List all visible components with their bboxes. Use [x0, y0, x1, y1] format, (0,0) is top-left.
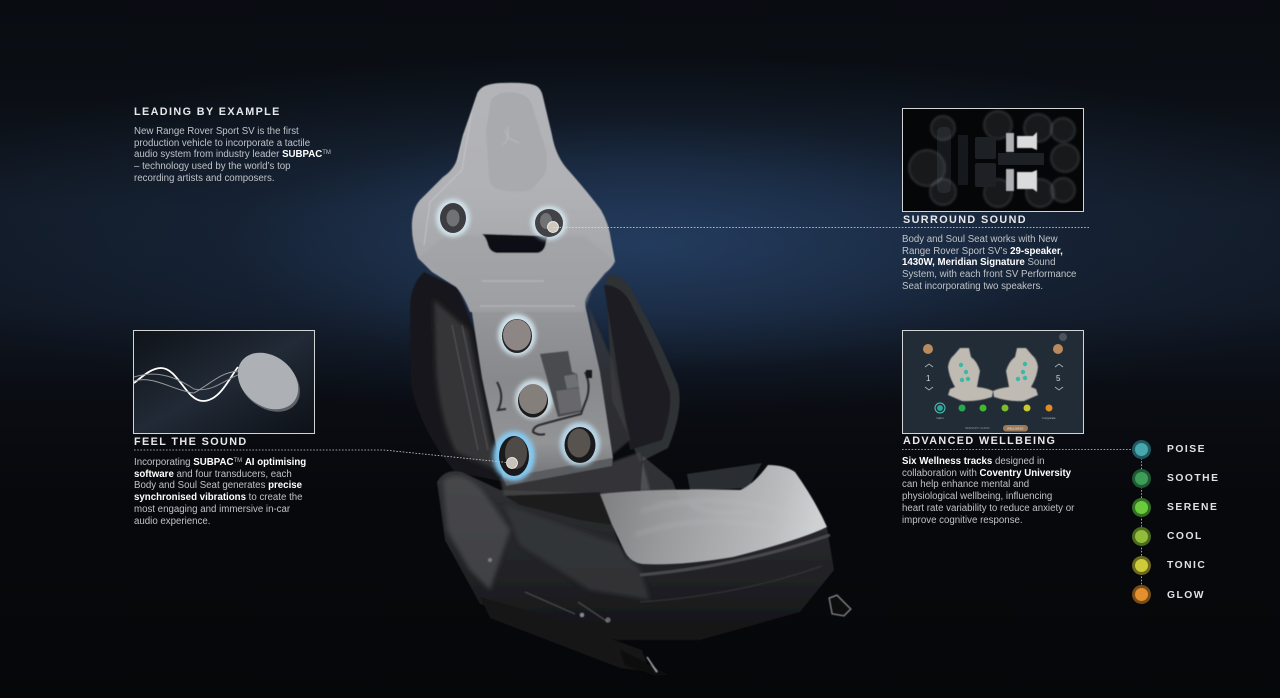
text: advanced wellbeing: collaboration with Coventry University — [902, 468, 1071, 479]
text: advanced wellbeing — [902, 456, 1074, 526]
label: tonic: TONIC — [1167, 560, 1206, 571]
image: top view of cabin speakers — [902, 108, 1084, 212]
image: wellness touchscreen: Invigorate — [1042, 416, 1056, 420]
text: surround sound: Range Rover Sport SV’s 29-speaker, — [902, 246, 1063, 257]
text: advanced wellbeing: can help enhance mental and — [902, 479, 1029, 490]
image: wellness touchscreen: SENSORY AUDIO — [965, 426, 990, 430]
text: leading by example: recording artists and composers. — [134, 173, 275, 184]
seat cushion — [600, 456, 827, 564]
seat rails and feet — [620, 595, 851, 676]
text: surround sound — [902, 234, 1076, 292]
heading: advanced wellbeing: ADVANCED WELLBEING — [903, 435, 1056, 447]
image: transducer with sound waves — [133, 330, 315, 434]
image: wellness touchscreen: 5 — [1056, 374, 1061, 383]
text: surround sound: System, with each front SV Performance — [902, 269, 1076, 280]
text: feel the sound: most engaging and immersive in-car — [134, 504, 290, 515]
callout line: advanced wellbeing — [902, 448, 1134, 450]
label: glow: GLOW — [1167, 590, 1205, 601]
callout line: surround sound — [553, 226, 1090, 228]
seat back shell and headrest — [412, 83, 615, 312]
text: leading by example: audio system from industry leader SUBPACTM — [134, 149, 331, 160]
label: soothe: SOOTHE — [1167, 473, 1219, 484]
callout line: feel the sound — [134, 450, 512, 463]
label: cool: COOL — [1167, 531, 1203, 542]
seat back panel — [470, 300, 613, 486]
upper speakers with glow — [436, 199, 567, 240]
seat base — [437, 452, 834, 672]
control module and wiring — [497, 351, 592, 435]
text: leading by example: production vehicle to incorporate a tactile — [134, 138, 310, 149]
text: leading by example — [134, 126, 331, 184]
wellness track markers — [1132, 440, 1151, 604]
marker: glow — [1132, 585, 1151, 604]
image: wellness touchscreen: Calm — [936, 416, 944, 420]
marker: serene — [1132, 498, 1151, 517]
text: feel the sound: Body and Soul Seat generates precise — [134, 480, 302, 491]
marker: tonic — [1132, 556, 1151, 575]
text: surround sound: Body and Soul Seat works with New — [902, 234, 1058, 245]
right side bolster — [588, 275, 680, 462]
label: poise: POISE — [1167, 444, 1206, 455]
text: feel the sound: Incorporating SUBPACTM AI optimising — [134, 457, 306, 468]
image: wellness touchscreen: 1 — [926, 374, 931, 383]
text: surround sound: Seat incorporating two speakers. — [902, 281, 1043, 292]
track connector line — [1140, 458, 1142, 590]
text: advanced wellbeing: Six Wellness tracks designed in — [902, 456, 1045, 467]
image: wellness touchscreen — [902, 330, 1084, 434]
callout dot: speaker — [548, 222, 558, 232]
marker: poise — [1132, 440, 1151, 459]
heading: leading by example: LEADING BY EXAMPLE — [134, 106, 281, 118]
text: feel the sound: audio experience. — [134, 516, 210, 527]
callout dot: transducer — [506, 458, 518, 468]
text: advanced wellbeing: improve cognitive response. — [902, 515, 1023, 526]
text: surround sound: 1430W, Meridian Signature Sound — [902, 257, 1055, 268]
marker: soothe — [1132, 469, 1151, 488]
text: advanced wellbeing: physiological wellbeing, influencing — [902, 491, 1052, 502]
text: leading by example: – technology used by the world’s top — [134, 161, 291, 172]
text: feel the sound: software and four transducers, each — [134, 469, 292, 480]
image: wellness touchscreen: WELLNESS — [1007, 426, 1023, 430]
heading: surround sound: SURROUND SOUND — [903, 214, 1027, 226]
marker: cool — [1132, 527, 1151, 546]
text: feel the sound: synchronised vibrations to create the — [134, 492, 303, 503]
heading: feel the sound: FEEL THE SOUND — [134, 436, 248, 448]
left side bolster — [410, 272, 505, 482]
text: advanced wellbeing: heart rate variability to reduce anxiety or — [902, 503, 1074, 514]
text: feel the sound — [134, 457, 306, 527]
transducers with glow — [493, 314, 600, 481]
label: serene: SERENE — [1167, 502, 1218, 513]
text: leading by example: New Range Rover Sport SV is the first — [134, 126, 299, 137]
